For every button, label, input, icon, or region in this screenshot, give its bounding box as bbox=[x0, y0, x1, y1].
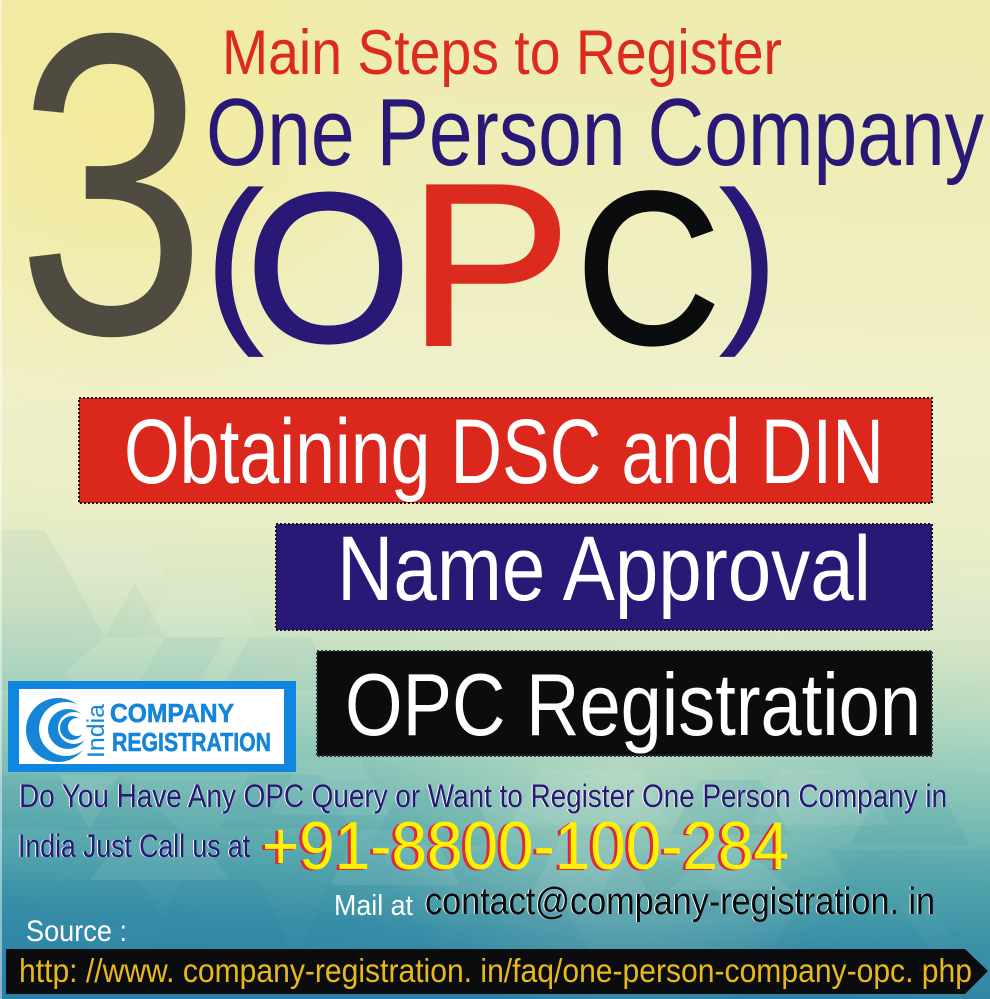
icon: concentric crescents bbox=[26, 698, 93, 762]
heading: (OPC): C bbox=[577, 149, 719, 388]
phone number: +91-8800-100-284 bbox=[262, 808, 789, 884]
heading: (OPC) bbox=[204, 136, 779, 395]
logo: India Company Registration bbox=[8, 681, 296, 772]
heading: (OPC): O bbox=[246, 149, 411, 386]
logo: India Company Registration: India bbox=[83, 703, 110, 758]
heading: (OPC): P bbox=[407, 136, 572, 395]
contact text: call line: India Just Call us at bbox=[18, 828, 250, 864]
contact text: email address: contact@company-registration. in bbox=[425, 881, 935, 923]
logo: India Company Registration: REGISTRATION bbox=[112, 727, 271, 757]
contact text: mail label: Mail at bbox=[334, 890, 413, 922]
heading: (OPC): ( bbox=[204, 153, 265, 358]
step 2 bar: name approval: Name Approval bbox=[337, 518, 871, 620]
logo: India Company Registration: COMPANY bbox=[110, 698, 234, 728]
source label: Source : bbox=[26, 915, 127, 948]
heading: main steps: Main Steps to Register bbox=[222, 18, 782, 88]
heading: (OPC): ) bbox=[718, 153, 779, 358]
